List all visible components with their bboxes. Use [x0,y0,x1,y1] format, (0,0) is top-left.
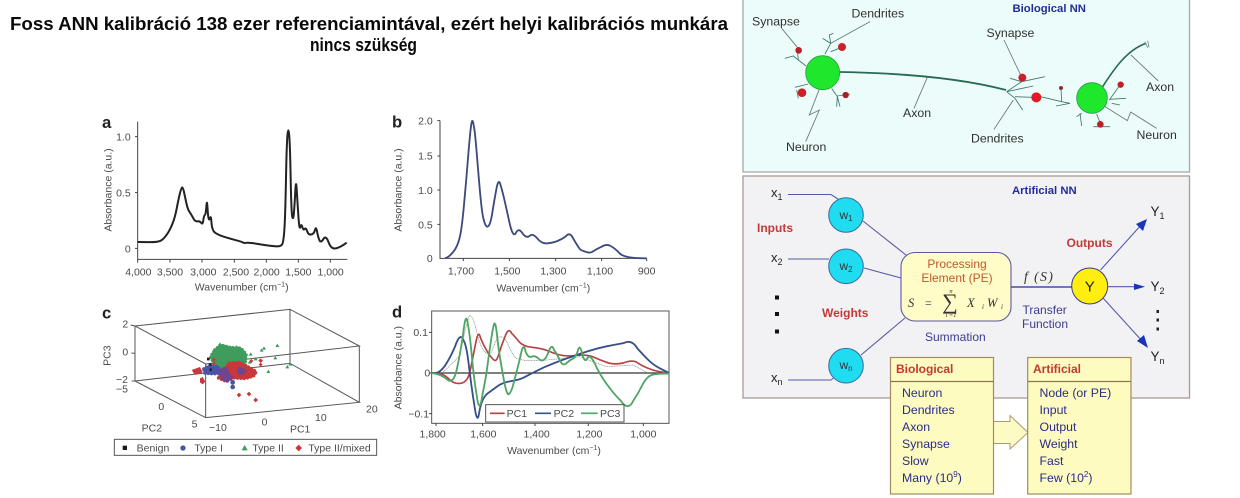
chart a: absorbance spectrum: 4,000 [125,267,152,278]
weight node w1: w [839,208,848,222]
labels: biological parts: Dendrites [971,132,1024,146]
inputs [771,185,783,387]
chart a: absorbance spectrum: 2,000 [254,267,280,278]
legend d: PC1 [507,409,527,420]
table: Artificial [1028,358,1131,494]
processing element: = [925,296,932,310]
processing element: ∑ [942,289,958,314]
title: Foss ANN kalibráció 138 ezer referenciamintával, ezért helyi kalibrációs munkára [10,13,729,34]
chart c: 3D PCA scatter: 0 [158,402,164,413]
processing element: Processing [927,257,987,271]
outputs labels [1150,204,1165,366]
chart a: absorbance spectrum: 2,500 [223,267,249,278]
output node Y [1072,268,1108,304]
chart d: PC loadings: −0.1 [408,409,429,420]
table: Artificial: ) [1088,471,1092,485]
processing element: i [982,303,984,311]
processing element: S [908,296,915,310]
chart a: absorbance spectrum: a [102,113,112,132]
chart d: PC loadings: 1,200 [576,430,603,441]
table: Biological: Dendrites [902,403,955,417]
chart b: amide spectrum: 1,100 [587,266,613,277]
outputs labels: Y [1150,349,1160,364]
chart c: 3D PCA scatter: 10 [315,413,327,424]
labels: biological parts: Axon [1146,80,1174,94]
labels: biological parts: Synapse [752,14,800,28]
table: Artificial: Weight [1040,437,1078,451]
heading: Artificial NN: Artificial NN [1012,185,1077,197]
label: Outputs: Outputs [1066,236,1113,250]
processing element: i =1 [945,312,957,319]
chart d: PC loadings: −1 [589,445,598,452]
table: Artificial: Artificial [1033,362,1081,376]
weight node w1 [829,198,863,232]
transfer function link [1011,286,1072,288]
outputs labels: Y [1150,279,1160,294]
labels: biological parts [752,6,1177,154]
table: Biological: Axon [902,420,930,434]
legend c: Type II [252,444,284,455]
weight node wn [829,348,863,383]
labels: biological parts: Neuron [1136,128,1177,142]
inputs: x [771,250,778,265]
chart a: absorbance spectrum: 3,500 [157,267,183,278]
table: Biological: ) [958,471,962,485]
table: Artificial: Fast [1040,454,1064,468]
table: Artificial: Output [1040,420,1077,434]
chart b: amide spectrum: 1,300 [540,266,567,277]
weight node w2: 2 [848,265,853,274]
chart c: 3D PCA scatter: 20 [366,404,378,415]
title [10,13,729,55]
legend c: Type II/mixed [308,444,371,455]
inputs: 1 [778,192,783,202]
chart c: 3D PCA scatter: −5 [116,385,128,396]
panel: biological neural network [743,0,1190,172]
inputs: n [778,377,783,387]
chart a: absorbance spectrum: ) [285,283,289,294]
axon: long fibre [840,72,1006,90]
chart b: amide spectrum: 1.5 [418,152,433,163]
labels: biological parts: Axon [903,106,931,120]
chart c: 3D PCA scatter [102,303,378,455]
outputs labels: Y [1150,204,1160,219]
chart d: PC loadings: 0.1 [413,328,428,339]
chart b: amide spectrum: Absorbance (a.u.) [393,148,404,232]
chart a: absorbance spectrum: 3,000 [190,267,217,278]
table: Biological: Neuron [902,386,942,400]
chart a: absorbance spectrum: Wavenumber (cm [195,283,277,294]
weight node w2 [829,249,863,284]
labels: biological parts: Synapse [986,26,1035,40]
arrows: outputs [1100,219,1148,348]
label: Transfer Function: Transfer [1022,303,1067,317]
table: Biological [890,358,994,494]
chart c: 3D PCA scatter: 0 [262,418,268,429]
processing element [901,252,1011,321]
chart c: 3D PCA scatter: −2 [116,375,128,386]
scatter points [192,342,292,402]
chart b: amide spectrum: 0 [427,254,433,265]
chart b: amide spectrum: 1,500 [494,266,521,277]
processing element: n [949,288,953,295]
chart a: absorbance spectrum [102,113,347,294]
chart d: PC loadings: 1,600 [470,430,497,441]
chart d: PC loadings: d [392,303,402,322]
legend d [486,405,624,422]
chart d: PC loadings: 0 [424,369,430,380]
processing element: Element (PE) [921,271,993,285]
panel: artificial neural network [743,176,1190,398]
chart b: amide spectrum: −1 [579,282,587,289]
legend d: PC3 [600,409,621,420]
legend c [114,439,377,455]
processing element: X [966,296,976,310]
chart b: amide spectrum [392,112,656,294]
inputs: x [771,185,778,200]
heading: Biological NN: Biological NN [1012,3,1086,15]
chart b: amide spectrum: 1.0 [418,186,433,197]
table: Biological: Biological [896,362,953,376]
processing element: i [1001,303,1003,311]
chart b: amide spectrum: Wavenumber (cm [496,283,579,294]
chart c: 3D PCA scatter: 5 [192,420,198,431]
legend c: Type I [194,444,223,455]
weight node wn: w [839,358,848,372]
chart d: PC loadings: 1,400 [524,430,550,441]
chart b: amide spectrum: b [392,112,402,131]
label: Transfer Function [1022,303,1068,331]
chart d: PC loadings: 1,000 [630,430,657,441]
weight node w1: 1 [848,214,853,223]
chart a: absorbance spectrum: −1 [277,282,285,289]
labels: biological parts: Neuron [786,140,826,154]
legend c: Benign [137,444,169,455]
title: nincs szükség [310,34,417,55]
chart a: absorbance spectrum: 1,000 [318,267,344,278]
legend d: PC2 [554,409,574,420]
chart b: amide spectrum: ) [587,283,590,294]
processing element: W [987,296,999,310]
chart c: 3D PCA scatter: PC2 [142,424,162,435]
chart c: 3D PCA scatter: 2 [122,319,128,330]
inputs: x [771,370,778,385]
chart a: absorbance spectrum: 0.5 [116,189,131,200]
chart c: 3D PCA scatter: 0 [122,347,128,358]
table: Artificial: Node (or PE) [1040,386,1111,400]
chart d: PC loadings: 1,800 [420,430,446,441]
chart c: 3D PCA scatter: c [102,303,111,322]
labels: biological parts: Dendrites [852,6,904,20]
connections: inputs and weights [788,194,906,380]
label: Transfer Function: Function [1022,317,1068,331]
outputs labels: n [1160,356,1165,366]
table: Artificial: Few (10 [1040,471,1084,485]
chart a: absorbance spectrum: 1.0 [116,132,131,143]
outputs labels: 1 [1160,211,1165,221]
table: Biological: 9 [953,470,958,479]
chart c: 3D PCA scatter: PC1 [290,424,311,435]
chart b: amide spectrum: 0.5 [418,220,433,231]
chart b: amide spectrum: 1,700 [448,266,474,277]
label: Summation: Summation [925,330,986,344]
chart d: PC loadings: Absorbance (a.u.) [393,326,404,409]
chart d: PC loadings: ) [597,446,601,457]
right neuron details [994,40,1158,129]
chart c: 3D PCA scatter: PC3 [103,345,114,366]
weight node w2: w [839,259,848,273]
label: Weights: Weights [822,306,869,320]
chart b: amide spectrum: 2.0 [418,116,433,127]
chart c: 3D PCA scatter: −10 [209,423,227,434]
chart a: absorbance spectrum: 1,500 [285,267,312,278]
outputs labels: 2 [1160,286,1165,296]
weight node wn: n [848,364,853,373]
chart a: absorbance spectrum: 0 [125,244,131,255]
chart d: PC loadings [392,303,669,457]
table: Artificial: Input [1040,403,1067,417]
table: Biological: Slow [902,454,929,468]
left neuron details [782,22,927,142]
chart d: PC loadings: Wavenumber (cm [507,446,589,457]
label: Inputs: Inputs [757,221,793,235]
table: Biological: Many (10 [902,471,953,485]
arrow: biological to artificial [994,416,1028,449]
inputs: 2 [778,257,783,267]
chart b: amide spectrum: 900 [638,266,656,277]
chart a: absorbance spectrum: Absorbance (a.u.) [103,148,114,232]
table: Artificial: 2 [1084,470,1089,479]
output node Y: Y [1085,278,1095,296]
label: f(S): f (S) [1024,269,1054,284]
table: Biological: Synapse [902,437,950,451]
